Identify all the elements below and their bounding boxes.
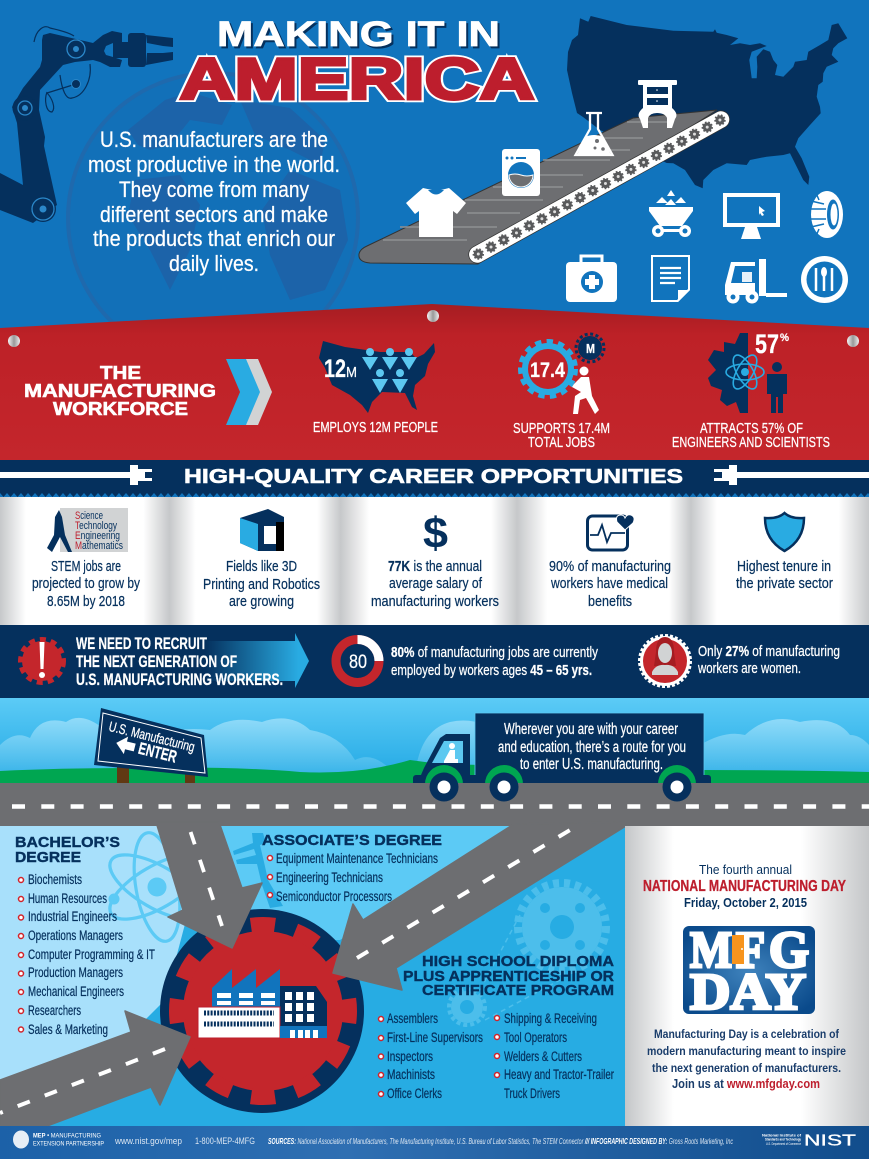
text: truck message: Wherever you are with your career [504,721,678,738]
list: bachelor's degree: Industrial Engineers [28,909,117,924]
icon: forklift [725,259,787,304]
logo: NIST: U.S. Department of Commerce [766,1142,801,1146]
text: recruit message: U.S. MANUFACTURING WORKERS. [76,670,283,689]
arrow: road to high school [0,1011,190,1126]
stat: attracts 57%: % [780,332,789,344]
logo: MFG Day: M [690,922,732,979]
icon: atom watermark [101,829,213,945]
text: MEP name [33,1134,104,1148]
text: 80 percent [391,644,598,679]
icon: MEP logo [13,1130,29,1148]
logo: MFG Day: F [736,922,765,979]
title: MAKING IT IN [217,15,500,54]
list: bachelor's degree: Human Resources [28,891,107,906]
icon: left plug [0,465,152,485]
icon: exclamation gear [20,640,64,682]
list: bachelor's degree: DEGREE [15,850,81,866]
text: contact [114,1136,255,1147]
truck [413,713,711,786]
list: high school diploma: Truck Drivers [504,1086,560,1101]
column: STEM jobs: STEM jobs are [51,558,121,575]
panel: recruit band [0,625,869,698]
map: United States silhouette [567,16,847,188]
text: 27 percent: Only 27% of manufacturing [698,643,840,660]
logo: NIST [762,1132,856,1150]
text block: intro: daily lives. [169,251,259,276]
list: bachelor's degree: Researchers [28,1003,81,1018]
stat: employs 12M: EMPLOYS 12M PEOPLE [313,420,438,436]
icon: computer monitor [723,193,780,239]
list: bachelor's degree [15,835,155,1037]
icon: mine cart [649,190,693,237]
text: manufacturing day description: the next generation of manufacturers. [652,1061,841,1075]
text: truck message [498,721,686,773]
panel: manufacturing workforce [0,304,869,461]
icon: gears watermark [449,883,606,1025]
list: bachelor's degree: Sales & Marketing [28,1022,108,1037]
list: high school diploma [378,954,615,1101]
column: 3D printing and robotics: Fields like 3D [226,558,297,575]
column: STEM jobs: Science [75,510,103,522]
text: sources: SOURCES: National Association of Manufacturers, The Manufacturing Institute, U.S. Bureau of Labor Statistics, The STEM Connector /// INFOGRAPHIC DESIGNED BY: Gross Roots Marketing, Inc [268,1136,733,1146]
stat: supports 17.4M: SUPPORTS 17.4M [513,421,610,437]
heading: manufacturing day date [643,863,847,910]
text: MEP name: EXTENSION PARTNERSHIP [33,1142,104,1148]
list: bachelor's degree: Production Managers [28,965,123,980]
list: bachelor's degree: Computer Programming & IT [28,947,155,962]
text: manufacturing day description: modern manufacturing meant to inspire [647,1044,846,1058]
title [180,15,534,112]
text: recruit message: THE NEXT GENERATION OF [76,652,237,671]
list: high school diploma: CERTIFICATE PROGRAM [422,983,614,999]
list: high school diploma: Shipping & Receiving [504,1011,597,1026]
list: associate's degree: Engineering Technicians [276,870,383,885]
icon: caliper watermark [233,833,283,908]
arrow: chevron [226,359,272,425]
icon: robot arm [0,27,173,223]
column: 3D printing and robotics: are growing [229,593,294,610]
logo: NIST: Standards and Technology [765,1138,802,1142]
heading: the manufacturing workforce: WORKFORCE [53,399,188,419]
stat: employs 12M: 12 [324,355,346,383]
panel: road scene [0,698,869,826]
list: bachelor's degree: BACHELOR’S [15,835,120,851]
text block: intro: U.S. manufacturers are the [100,127,328,152]
icon: plate and cutlery [801,256,848,303]
icon: washing machine [502,149,540,196]
text: manufacturing day description: Join us at www.mfgday.com [672,1077,820,1091]
logo: MFG Day: G [769,922,809,979]
chart: 80 percent donut [336,640,379,682]
list: associate's degree: ASSOCIATE’S DEGREE [262,833,442,849]
text: 27 percent [697,643,840,677]
title: AMERICA [180,47,534,112]
stat: employs 12M [313,341,438,436]
list: high school diploma: Heavy and Tractor-Trailer [504,1067,614,1082]
clouds [0,718,869,775]
panel: national manufacturing day [625,826,869,1126]
logo: NIST: NIST [804,1132,856,1150]
list: high school diploma: Welders & Cutters [504,1049,582,1064]
column: STEM jobs: Engineering [75,530,120,542]
list: associate's degree: Semiconductor Processors [276,889,392,904]
list: high school diploma: Tool Operators [504,1030,567,1045]
chart: 80 percent donut: 80 [349,652,367,673]
column: highest tenure: Highest tenure in [737,558,831,575]
text block: intro: They come from many [119,177,309,202]
icon: factory [198,969,327,1038]
stat: attracts 57%: ATTRACTS 57% OF [700,421,803,437]
stat: supports 17.4M [513,334,610,451]
panel: top blue header [0,0,869,363]
road sign [94,708,208,784]
icon: right plug [714,465,869,485]
column: medical benefits [549,515,671,610]
column: 3D printing and robotics [203,509,320,610]
panel: career pathways [0,822,626,1126]
column: STEM jobs: 8.65M by 2018 [47,593,125,610]
icon: woman gear [640,636,690,686]
panel: high-quality career opportunities [0,460,869,625]
list: high school diploma: First-Line Supervisors [387,1030,483,1045]
title: AMERICA [180,47,534,112]
arrow: recruit [205,633,309,688]
list: high school diploma: Office Clerks [387,1086,442,1101]
icon: flask [576,113,612,155]
stat: attracts 57% [672,329,830,451]
list: high school diploma: Inspectors [387,1049,433,1064]
icon: tire [811,191,843,238]
text: recruit message [76,634,283,689]
text: MEP name: MEP • MANUFACTURING [33,1134,101,1140]
text block: intro: most productive in the world. [88,152,340,177]
icon: medical kit [566,256,617,302]
text: truck message: to enter U.S. manufacturing. [520,756,663,773]
text: 80 percent: 80% of manufacturing jobs are currently [391,644,598,661]
arrow: road to bachelor's [156,822,262,948]
screws [8,310,859,347]
column: average salary: $ [423,509,448,558]
text: manufacturing day description [647,1027,846,1091]
text: truck message: and education, there’s a route for you [498,739,686,756]
footer [0,1126,869,1159]
column: highest tenure: the private sector [736,575,833,592]
stat: supports 17.4M: 17.4 [530,359,565,382]
logo: MFG Day: DAY [690,964,806,1021]
title: MAKING IT IN [219,17,502,56]
list: associate's degree [262,833,442,904]
heading: manufacturing day date: The fourth annual [699,863,792,877]
stat: supports 17.4M: TOTAL JOBS [528,435,595,451]
list: associate's degree: Equipment Maintenance Technicians [276,851,438,866]
text: recruit message: WE NEED TO RECRUIT [76,634,207,653]
logo: MFG Day [683,922,815,1021]
list: bachelor's degree: Operations Managers [28,928,123,943]
list: high school diploma: PLUS APPRENTICESHIP OR [403,969,615,985]
icon: t-shirt [406,188,466,237]
heading: manufacturing day date: Friday, October 2, 2015 [684,895,807,910]
globe watermark [68,73,358,363]
column: medical benefits: 90% of manufacturing [549,558,671,575]
list: high school diploma: Machinists [387,1067,435,1082]
column: average salary: average salary of [389,575,483,592]
column: average salary [371,509,499,610]
column: highest tenure [736,513,833,592]
column: STEM jobs [32,508,140,610]
road sign: ENTER [136,739,179,767]
text: contact: www.nist.gov/mep [114,1136,182,1147]
column: medical benefits: benefits [588,593,632,610]
heading: career opportunities: HIGH-QUALITY CAREER OPPORTUNITIES [184,466,683,488]
column: STEM jobs: Technology [75,520,117,532]
column: 3D printing and robotics: Printing and Robotics [203,576,320,593]
icon: document [651,255,690,302]
icon: nightstand [638,80,677,128]
stat: employs 12M: M [346,364,357,381]
road sign: U.S. Manufacturing [107,718,197,755]
column: average salary: manufacturing workers [371,593,499,610]
list: high school diploma: Assemblers [387,1011,438,1026]
text: 27 percent: workers are women. [697,660,801,677]
column: STEM jobs: Mathematics [75,540,123,552]
heading: the manufacturing workforce: THE [100,363,141,383]
text block: intro: the products that enrich our [93,226,335,251]
text: contact: 1-800-MEP-4MFG [195,1136,255,1147]
column: average salary: 77K is the annual [388,558,482,575]
logo: NIST: National Institute of [762,1134,802,1138]
list: bachelor's degree: Biochemists [28,872,82,887]
text block: intro: different sectors and make [100,202,328,227]
text: 80 percent: employed by workers ages 45 – 65 yrs. [391,662,592,679]
heading: the manufacturing workforce: MANUFACTURING [24,381,216,401]
hills [0,760,869,784]
text: manufacturing day description: Manufacturing Day is a celebration of [654,1027,840,1041]
chart: conveyor belt [359,110,725,264]
list: high school diploma: HIGH SCHOOL DIPLOMA [422,954,615,970]
arrow: road to associate's [333,822,626,990]
column: STEM jobs: projected to grow by [32,575,140,592]
text block: intro [88,127,340,276]
column: medical benefits: workers have medical [550,575,668,592]
icon: central gear [160,909,364,1113]
stat: supports 17.4M: M [586,341,595,356]
list: bachelor's degree: Mechanical Engineers [28,984,124,999]
heading: the manufacturing workforce [24,363,216,419]
stat: attracts 57%: 57 [755,329,779,359]
truck wheels [430,772,692,802]
